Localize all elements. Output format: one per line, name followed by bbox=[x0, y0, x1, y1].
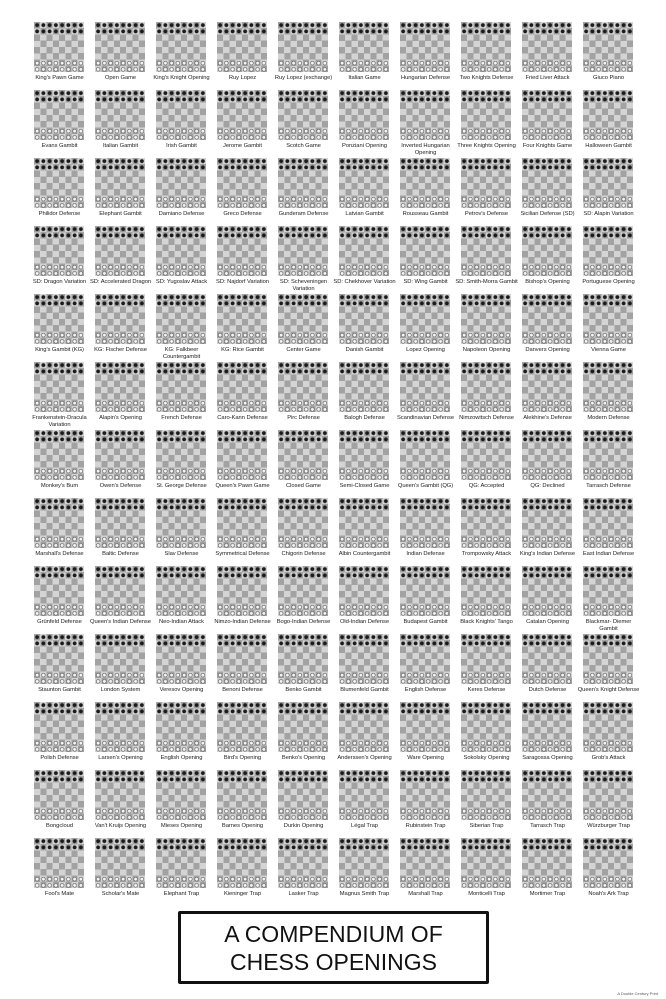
grid of chess openings: Scholar's Mate bbox=[102, 891, 139, 897]
grid of chess openings: Polish Defense bbox=[40, 755, 79, 761]
grid of chess openings: Alapin's Opening bbox=[99, 415, 142, 421]
grid of chess openings: Giuco Piano bbox=[593, 75, 624, 81]
grid of chess openings: Open Game bbox=[105, 75, 136, 81]
grid of chess openings: Center Game bbox=[286, 347, 321, 353]
grid of chess openings: Bird's Opening bbox=[224, 755, 261, 761]
grid of chess openings: King's Pawn Game bbox=[35, 75, 84, 81]
grid of chess openings: Durkin Opening bbox=[284, 823, 323, 829]
grid of chess openings: Marshall's Defense bbox=[35, 551, 84, 557]
grid of chess openings: Queen's Pawn Game bbox=[215, 483, 270, 489]
grid of chess openings: Ruy Lopez (exchange) bbox=[275, 75, 332, 81]
grid of chess openings: Benoni Defense bbox=[222, 687, 263, 693]
grid of chess openings: Slav Defense bbox=[165, 551, 198, 557]
grid of chess openings: Bongcloud bbox=[46, 823, 73, 829]
grid of chess openings: Gunderam Defense bbox=[279, 211, 328, 217]
grid of chess openings: Latvian Gambit bbox=[345, 211, 384, 217]
grid of chess openings: London System bbox=[101, 687, 140, 693]
grid of chess openings: Monkey's Bum bbox=[41, 483, 78, 489]
title box bbox=[178, 911, 489, 984]
grid of chess openings: Frankenstein-Dracula bbox=[32, 415, 87, 421]
grid of chess openings: Siberian Trap bbox=[470, 823, 503, 829]
grid of chess openings: SD: Wing Gambit bbox=[403, 279, 448, 285]
grid of chess openings: Kieninger Trap bbox=[224, 891, 261, 897]
grid of chess openings: Symmetrical Defense bbox=[215, 551, 270, 557]
grid of chess openings: Benko Gambit bbox=[285, 687, 322, 693]
grid of chess openings: Queen's Gambit (QG) bbox=[398, 483, 453, 489]
grid of chess openings: Queen's Indian Defense bbox=[90, 619, 151, 625]
grid of chess openings: SD: Najdorf Variation bbox=[216, 279, 269, 285]
grid of chess openings: Grünfeld Defense bbox=[37, 619, 82, 625]
grid of chess openings: KG: Rice Gambit bbox=[221, 347, 264, 353]
grid of chess openings: Noah's Ark Trap bbox=[588, 891, 629, 897]
grid of chess openings: Owen's Defense bbox=[100, 483, 141, 489]
grid of chess openings: Van't Kruijs Opening bbox=[95, 823, 146, 829]
title box: CHESS OPENINGS bbox=[230, 949, 437, 975]
grid of chess openings: Ruy Lopez bbox=[229, 75, 256, 81]
grid of chess openings: Scandinavian Defense bbox=[397, 415, 454, 421]
grid of chess openings: English Opening bbox=[161, 755, 202, 761]
grid of chess openings: SD: Dragon Variation bbox=[33, 279, 86, 285]
grid of chess openings: Italian Game bbox=[348, 75, 381, 81]
grid of chess openings: Mortimer Trap bbox=[530, 891, 565, 897]
grid of chess openings: East Indian Defense bbox=[583, 551, 634, 557]
grid of chess openings: Bogo-Indian Defense bbox=[277, 619, 330, 625]
grid of chess openings: Albin Countergambit bbox=[339, 551, 390, 557]
grid of chess openings: Anderssen's Opening bbox=[337, 755, 392, 761]
grid of chess openings: Catalan Opening bbox=[526, 619, 569, 625]
grid of chess openings: Rubinstein Trap bbox=[406, 823, 445, 829]
grid of chess openings: Elephant Trap bbox=[164, 891, 199, 897]
grid of chess openings: Blumenfeld Gambit bbox=[340, 687, 389, 693]
grid of chess openings: King's Gambit (KG) bbox=[35, 347, 84, 353]
grid of chess openings: Bishop's Opening bbox=[525, 279, 570, 285]
grid of chess openings: SD: Chekhover Variation bbox=[333, 279, 396, 285]
grid of chess openings: Indian Defense bbox=[406, 551, 445, 557]
grid of chess openings: SD: Yugoslav Attack bbox=[156, 279, 207, 285]
grid of chess openings: Gambit bbox=[599, 626, 618, 632]
grid of chess openings: KG: Falkbeer bbox=[165, 347, 198, 353]
grid of chess openings: Countergambit bbox=[163, 354, 200, 360]
grid of chess openings: SD: Scheveningen bbox=[280, 279, 327, 285]
grid of chess openings: Légal Trap bbox=[351, 823, 378, 829]
title box: A COMPENDIUM OF bbox=[224, 921, 443, 947]
grid of chess openings: Philidor Defense bbox=[39, 211, 80, 217]
grid of chess openings: Benko's Opening bbox=[282, 755, 325, 761]
grid of chess openings: Danish Gambit bbox=[346, 347, 383, 353]
grid of chess openings: Closed Game bbox=[286, 483, 321, 489]
grid of chess openings: Lopez Opening bbox=[406, 347, 445, 353]
grid of chess openings: Jerome Gambit bbox=[223, 143, 262, 149]
grid of chess openings: Ponziani Opening bbox=[342, 143, 387, 149]
grid of chess openings: English Defense bbox=[405, 687, 446, 693]
grid of chess openings: QG: Accepted bbox=[469, 483, 504, 489]
grid of chess openings: Budapest Gambit bbox=[403, 619, 448, 625]
grid of chess openings: Nimzowitsch Defense bbox=[459, 415, 514, 421]
grid of chess openings: Evans Gambit bbox=[42, 143, 77, 149]
grid of chess openings: QG: Declined bbox=[530, 483, 565, 489]
grid of chess openings: Trompowsky Attack bbox=[462, 551, 511, 557]
grid of chess openings: Saragossa Opening bbox=[522, 755, 573, 761]
grid of chess openings: Mieses Opening bbox=[161, 823, 202, 829]
grid of chess openings: Elephant Gambit bbox=[99, 211, 142, 217]
grid of chess openings: Irish Gambit bbox=[166, 143, 197, 149]
grid of chess openings: Nimzo-Indian Defense bbox=[214, 619, 271, 625]
grid of chess openings: Pirc Defense bbox=[287, 415, 320, 421]
grid of chess openings: Three Knights Opening bbox=[457, 143, 516, 149]
grid of chess openings: Rousseau Gambit bbox=[403, 211, 448, 217]
grid of chess openings: Semi-Closed Game bbox=[340, 483, 389, 489]
grid of chess openings: Hungarian Defense bbox=[401, 75, 450, 81]
grid of chess openings: Tarrasch Defense bbox=[586, 483, 631, 489]
grid of chess openings: Sicilian Defense (SD) bbox=[520, 211, 575, 217]
grid of chess openings: Black Knights' Tango bbox=[460, 619, 513, 625]
grid of chess openings: Staunton Gambit bbox=[38, 687, 81, 693]
grid of chess openings: Napoleon Opening bbox=[463, 347, 510, 353]
grid of chess openings: King's Knight Opening bbox=[153, 75, 210, 81]
grid of chess openings: Old-Indian Defense bbox=[340, 619, 389, 625]
grid of chess openings: SD: Alapin Variation bbox=[583, 211, 634, 217]
grid of chess openings: Caro-Kann Defense bbox=[217, 415, 268, 421]
grid of chess openings: Four Knights Game bbox=[523, 143, 572, 149]
grid of chess openings: Neo-Indian Attack bbox=[159, 619, 204, 625]
grid of chess openings: Lasker Trap bbox=[288, 891, 319, 897]
grid of chess openings: Scotch Game bbox=[286, 143, 321, 149]
grid of chess openings: Damiano Defense bbox=[159, 211, 204, 217]
grid of chess openings: Sokolsky Opening bbox=[464, 755, 509, 761]
grid of chess openings: Queen's Knight Defense bbox=[578, 687, 639, 693]
grid of chess openings: King's Indian Defense bbox=[520, 551, 575, 557]
grid of chess openings: Italian Gambit bbox=[103, 143, 138, 149]
grid of chess openings: Vienna Game bbox=[591, 347, 626, 353]
grid of chess openings: Greco Defense bbox=[223, 211, 262, 217]
grid of chess openings: Grob's Attack bbox=[592, 755, 625, 761]
grid of chess openings: KG: Fischer Defense bbox=[94, 347, 147, 353]
grid of chess openings: Magnus Smith Trap bbox=[340, 891, 389, 897]
grid of chess openings: SD: Accelerated Dragon bbox=[90, 279, 151, 285]
grid of chess openings: Tarrasch Trap bbox=[530, 823, 565, 829]
grid of chess openings: Alekhine's Defense bbox=[523, 415, 572, 421]
grid of chess openings: Marshall Trap bbox=[408, 891, 443, 897]
grid of chess openings: Ware Opening bbox=[407, 755, 444, 761]
grid of chess openings: Opening bbox=[415, 150, 436, 156]
grid of chess openings: Fool's Mate bbox=[45, 891, 74, 897]
grid of chess openings: Dutch Defense bbox=[529, 687, 566, 693]
grid of chess openings: Veresov Opening bbox=[160, 687, 203, 693]
grid of chess openings: Baltic Defense bbox=[102, 551, 139, 557]
grid of chess openings: Portuguese Opening bbox=[582, 279, 635, 285]
grid of chess openings: Blackmar- Diemer bbox=[586, 619, 631, 625]
grid of chess openings: Inverted Hungarian bbox=[401, 143, 450, 149]
grid of chess openings: Danvers Opening bbox=[525, 347, 570, 353]
grid of chess openings: SD: Smith-Morra Gambit bbox=[455, 279, 518, 285]
footer credit: A Double Century Print bbox=[617, 991, 658, 996]
grid of chess openings: Würzburger Trap bbox=[587, 823, 630, 829]
grid of chess openings: Chigorin Defense bbox=[282, 551, 326, 557]
grid of chess openings: Petrov's Defense bbox=[465, 211, 508, 217]
grid of chess openings: Halloween Gambit bbox=[585, 143, 632, 149]
grid of chess openings: Balogh Defense bbox=[344, 415, 385, 421]
grid of chess openings: Barnes Opening bbox=[222, 823, 263, 829]
grid of chess openings: French Defense bbox=[161, 415, 202, 421]
grid of chess openings: St. George Defense bbox=[156, 483, 207, 489]
grid of chess openings: Variation bbox=[292, 286, 314, 292]
grid of chess openings: Two Knights Defense bbox=[460, 75, 513, 81]
grid of chess openings: Larsen's Opening bbox=[98, 755, 143, 761]
grid of chess openings: Variation bbox=[48, 422, 70, 428]
grid of chess openings: Monticelli Trap bbox=[468, 891, 505, 897]
grid of chess openings: Modern Defense bbox=[587, 415, 630, 421]
grid of chess openings: Fried Liver Attack bbox=[526, 75, 569, 81]
grid of chess openings: Keres Defense bbox=[468, 687, 505, 693]
